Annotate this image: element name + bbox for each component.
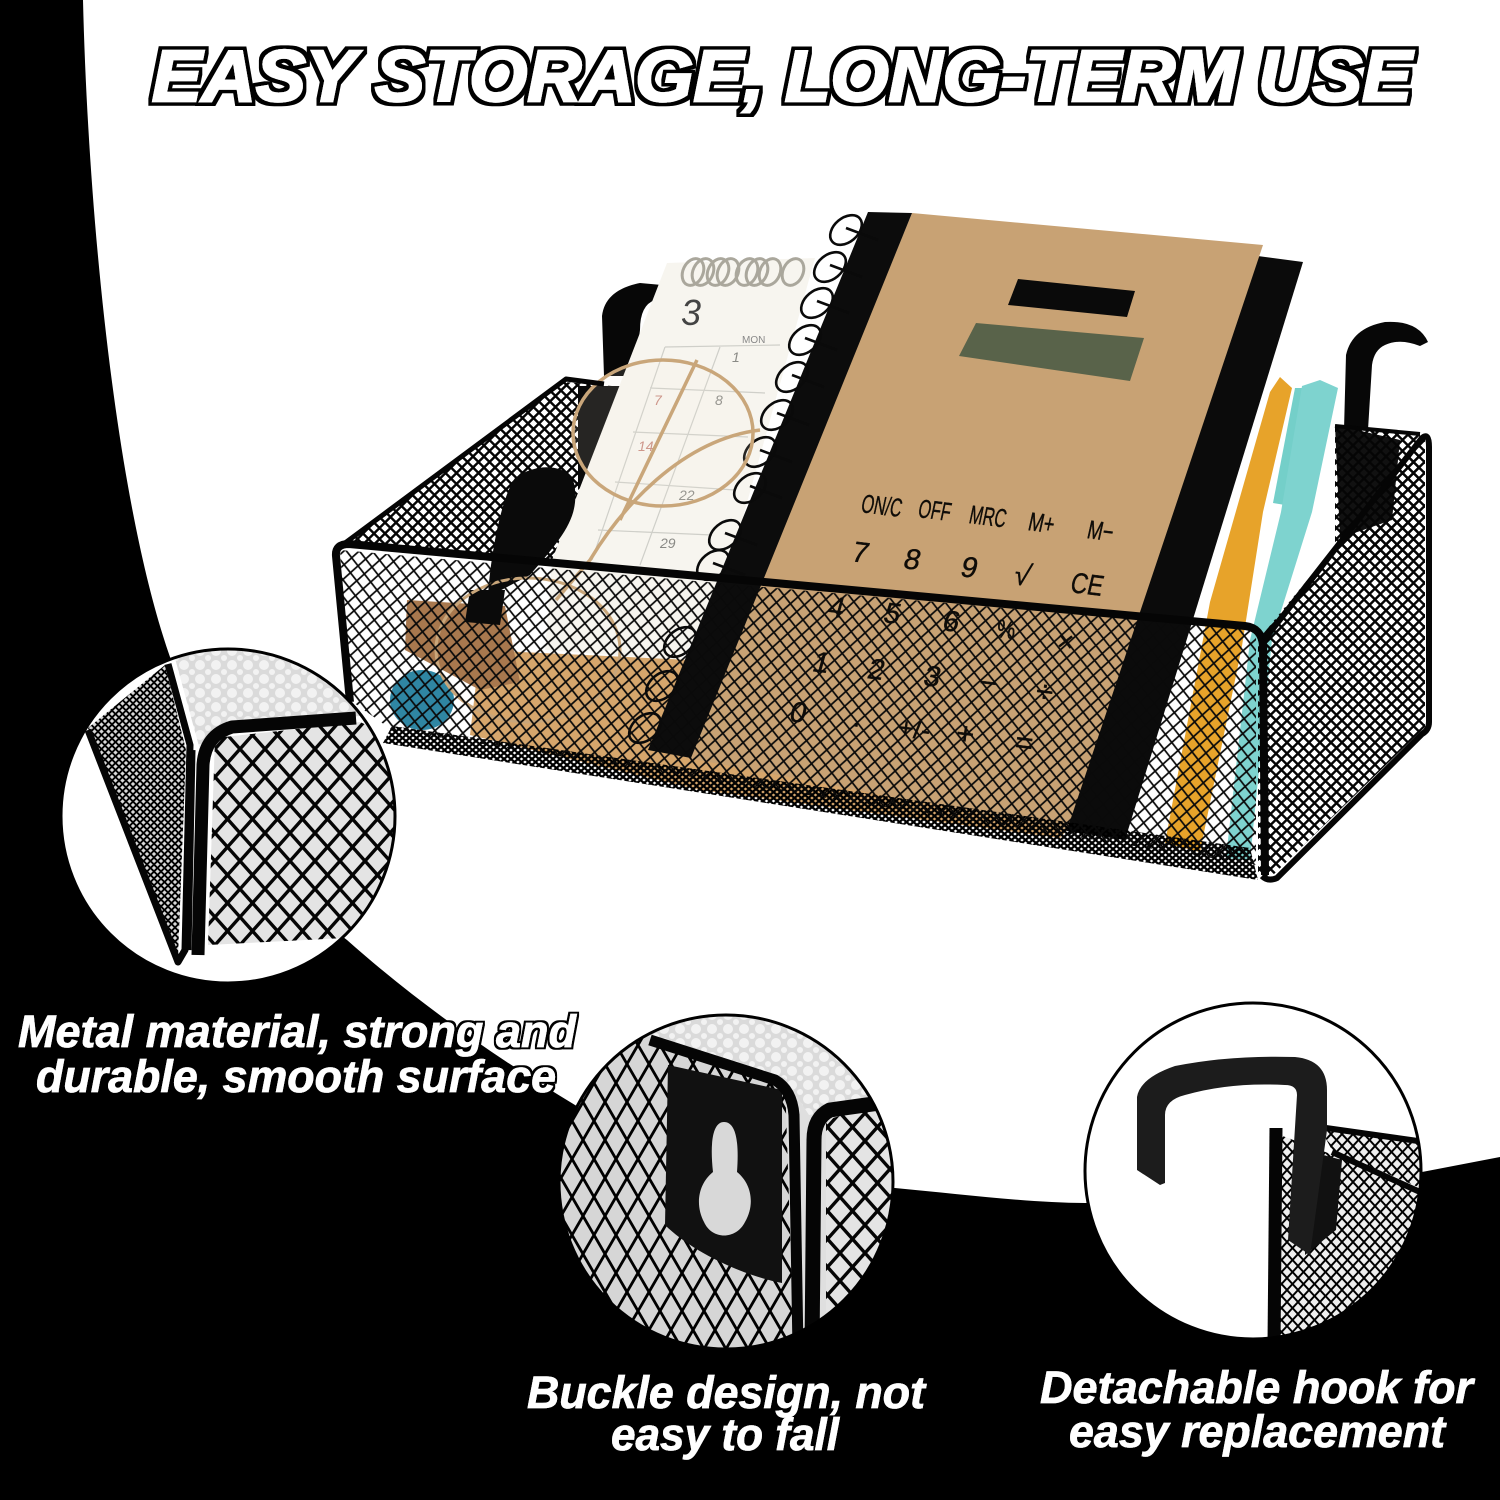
desk calendar [545, 255, 815, 660]
calculator keys: M+ [1026, 507, 1058, 539]
product: mesh basket with desk supplies [336, 209, 1429, 880]
basket right side mesh panel [1258, 437, 1425, 876]
calculator keys: − [977, 664, 999, 701]
clip slot shadow [1305, 1150, 1342, 1255]
calculator keys: + [954, 715, 976, 752]
basket floor fine mesh [383, 726, 1258, 880]
right hook [1335, 322, 1428, 538]
caption: buckle design: Buckle design, not [527, 1367, 927, 1418]
corner wire rails [88, 664, 356, 962]
back teal pen [1273, 388, 1302, 505]
metal hook [1137, 1057, 1327, 1255]
left hook [602, 283, 662, 376]
upper wire rails [1326, 1128, 1425, 1192]
calculator keys: √ [1010, 560, 1034, 593]
panel: mesh corner detail circle [61, 640, 400, 983]
calendar dates: 14 [638, 438, 654, 454]
notebook spiral binding [623, 209, 878, 749]
upper background texture [654, 1016, 868, 1115]
calculator keys: MRC [967, 499, 1009, 533]
calculator keys: 0 [786, 697, 811, 730]
side wire rail [1274, 1128, 1276, 1345]
title: EASY STORAGE, LONG-TERM USE [152, 37, 1414, 117]
calendar dates: 22 [678, 487, 695, 503]
lower mesh panel [1280, 1136, 1418, 1335]
back mesh area [176, 650, 360, 748]
calculator keys: . [851, 701, 863, 734]
basket back-left mesh panel [342, 382, 612, 570]
caption: detachable hook: Detachable hook for [1040, 1362, 1475, 1413]
calculator keys: M− [1085, 515, 1117, 547]
calendar dates: 8 [715, 392, 723, 408]
dark backing behind glasses [578, 386, 625, 490]
calendar binding rings [678, 255, 808, 289]
front mesh panel [208, 722, 400, 945]
calendar weekday label: MON [742, 335, 765, 346]
right mesh panel [826, 1112, 892, 1306]
left mesh panel [556, 1030, 794, 1350]
calculator keys: 3 [920, 661, 945, 694]
calendar dates: 1 [732, 349, 740, 365]
side mesh panel [88, 665, 186, 958]
yellow pen [1165, 377, 1292, 852]
keyhole plate [665, 1065, 782, 1283]
calculator keys: CE [1067, 566, 1107, 602]
calculator keys: = [1013, 724, 1035, 761]
caption: buckle design: easy to fall [611, 1409, 840, 1460]
teal pen [1226, 380, 1338, 860]
calculator keys: 9 [957, 552, 982, 585]
calculator keys: 4 [824, 592, 849, 625]
basket wire rails [336, 379, 1429, 880]
calculator keys: ON/C [859, 488, 905, 523]
calculator keys: 1 [809, 647, 834, 680]
notebook spine [648, 212, 912, 758]
calculator keys: 7 [848, 537, 873, 570]
calendar dates: 7 [654, 392, 663, 408]
panel: keyhole buckle detail circle [556, 1015, 900, 1350]
calendar grid [592, 345, 780, 565]
basket back-right mesh panel [1335, 428, 1420, 560]
makeup brush [390, 467, 575, 730]
calculator keys: +/- [896, 712, 932, 746]
calculator keys: % [995, 614, 1017, 645]
LCD screen [959, 323, 1144, 381]
caption: detachable hook: easy replacement [1069, 1406, 1447, 1457]
calendar month number: 3 [681, 292, 701, 333]
calculator keys: × [1055, 625, 1076, 659]
calendar dates: 29 [659, 535, 676, 551]
calculator notebook kraft cover [623, 209, 1263, 830]
basket front mesh panel [340, 550, 1256, 865]
calculator keys: ÷ [1034, 673, 1055, 710]
upper mesh panel [1326, 1131, 1420, 1187]
caption: metal material: Metal material, strong and [18, 1006, 578, 1057]
calculator keys: 2 [864, 654, 889, 687]
keyhole opening [699, 1122, 751, 1236]
caption: metal material: durable, smooth surface [36, 1051, 556, 1102]
calculator keys: 8 [900, 544, 925, 577]
back black cover of notebook [1060, 255, 1303, 840]
reading glasses [436, 360, 760, 722]
calculator keys: OFF [916, 493, 954, 527]
calculator keys: 6 [939, 606, 964, 639]
calculator keys: 5 [880, 598, 905, 631]
solar panel cutout [1008, 279, 1135, 317]
buckle wire rails [650, 1040, 880, 1350]
calculator keys [786, 488, 1117, 761]
lower papers inside basket [405, 600, 1067, 838]
panel: detachable hook detail circle [1085, 1003, 1425, 1345]
calendar dates [638, 349, 740, 551]
